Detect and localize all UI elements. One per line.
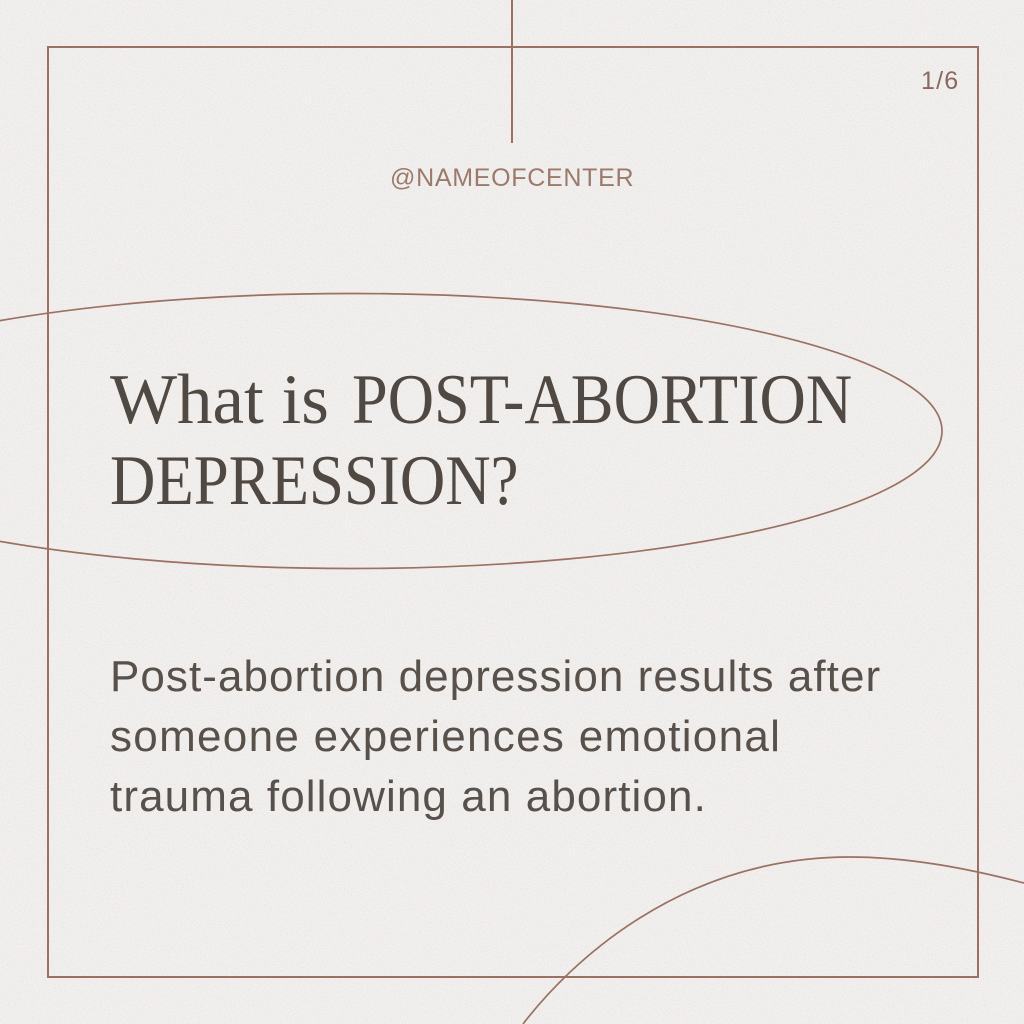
body text	[110, 652, 881, 821]
title	[110, 361, 852, 520]
body text: trauma following an abortion.	[110, 772, 707, 821]
title: What is	[110, 361, 329, 439]
body text: someone experiences emotional	[110, 712, 781, 761]
body text: Post-abortion depression results after	[110, 652, 881, 701]
handle: @NAMEOFCENTER	[390, 164, 634, 192]
page number: 1/6	[921, 67, 959, 95]
title: DEPRESSION?	[110, 442, 518, 520]
title: POST-ABORTION	[352, 361, 852, 439]
